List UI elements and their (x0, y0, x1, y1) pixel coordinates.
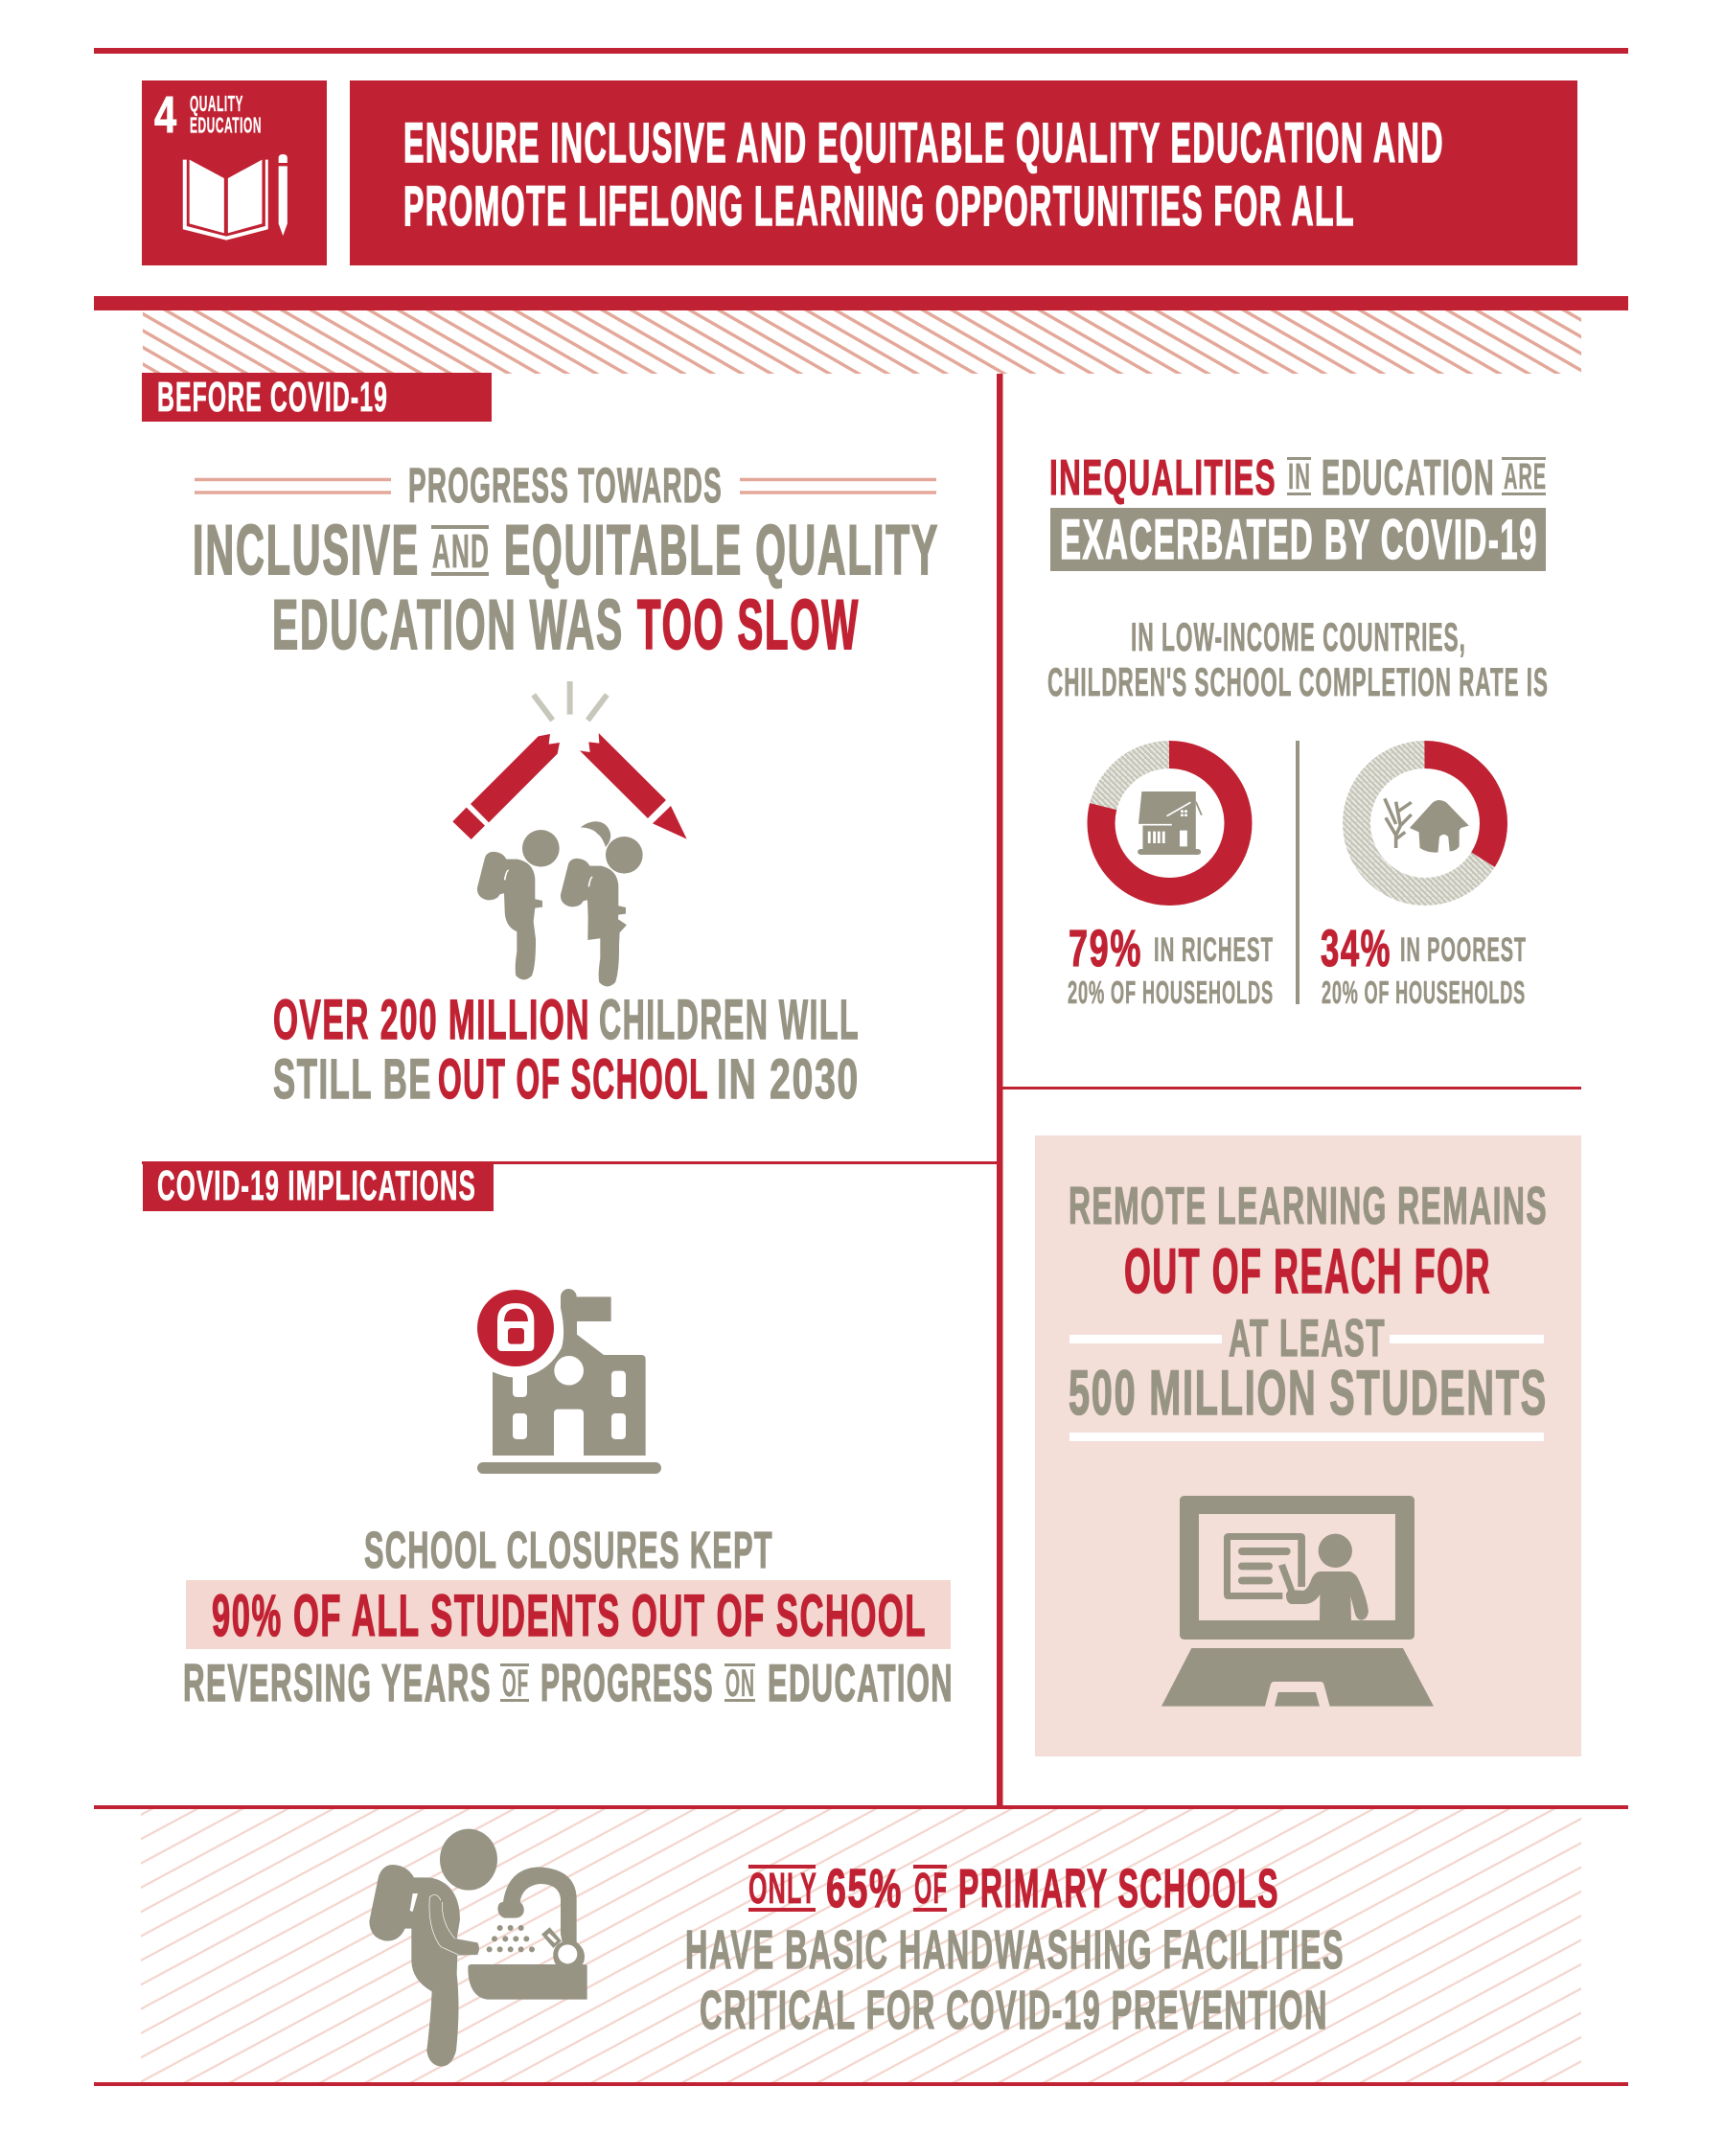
heading: inequalities in education are: EDUCATION (1322, 450, 1495, 506)
stat: 34% in poorest (1321, 920, 1527, 1010)
heading: inclusive and equitable quality education was too slow: EDUCATION WAS (272, 586, 624, 664)
bottom rule top (94, 1805, 1628, 1809)
heading: inclusive and equitable quality education was too slow: TOO SLOW (637, 586, 860, 664)
icon: book and pencil (183, 154, 288, 241)
stat: 79% in richest: 79% (1069, 920, 1142, 977)
goal name: EDUCATION (190, 113, 262, 138)
bottom rule (94, 2082, 1628, 2086)
text: at least: AT LEAST (1229, 1308, 1386, 1367)
heading: inequalities in education are: IN (1288, 457, 1311, 497)
text: only 65% of primary schools: OF (914, 1864, 948, 1913)
heading: progress towards: PROGRESS TOWARDS (408, 458, 723, 513)
panel: handwashing (141, 1809, 1581, 2082)
statement: over 200 million children: OVER 200 MILLION (273, 989, 590, 1051)
vertical separator (1296, 741, 1300, 1004)
icon: broken pencil over two children (452, 681, 687, 986)
icon: house (1138, 791, 1202, 855)
header: goal title banner (350, 80, 1577, 265)
donut chart: richest 79% (1101, 741, 1300, 1004)
stat: 34% in poorest: 34% (1321, 920, 1392, 977)
heading: inclusive and equitable quality education was too slow: EQUITABLE QUALITY (504, 512, 939, 589)
thick rule (94, 296, 1628, 310)
statement: over 200 million children: OUT OF SCHOOL (438, 1048, 709, 1111)
stat: 34% in poorest: IN POOREST (1400, 931, 1527, 969)
heading: progress towards (195, 458, 936, 513)
heading: inclusive and equitable quality education was too slow (193, 512, 939, 664)
left horizontal divider (142, 1161, 997, 1164)
statement: over 200 million children: IN 2030 (717, 1048, 860, 1111)
text: only 65% of primary schools (748, 1858, 1279, 1919)
heading: inequalities in education are: INEQUALITIES (1049, 450, 1276, 506)
statement: reversing years of progress on education: OF (502, 1663, 529, 1705)
goal name (190, 91, 262, 138)
heading: inclusive and equitable quality education was too slow: AND (432, 526, 490, 578)
heading: inclusive and equitable quality education was too slow: INCLUSIVE (193, 512, 420, 589)
donut chart: poorest 34% (1357, 755, 1493, 891)
callout: 90% of all students out of school: 90% OF ALL STUDENTS OUT OF SCHOOL (212, 1583, 927, 1648)
icon: hut and tree (1385, 798, 1469, 853)
stat: 79% in richest: IN RICHEST (1154, 931, 1274, 969)
callout: 90% of all students out of school (186, 1580, 951, 1649)
text: 500 million students (1069, 1357, 1548, 1441)
statement: reversing years of progress on education: PROGRESS (540, 1653, 714, 1712)
central vertical divider (997, 374, 1002, 1805)
panel: before covid-19 (193, 458, 939, 1111)
right horizontal divider (1002, 1087, 1581, 1089)
panel: covid-19 implications (183, 1289, 954, 1712)
header: goal 4 tile (142, 80, 327, 265)
text: at least (1070, 1308, 1544, 1367)
heading: inequalities in education are: ARE (1504, 457, 1547, 497)
icon: laptop with teacher (1162, 1496, 1434, 1707)
section label: covid-19 implications (143, 1162, 494, 1211)
icon: locked school (477, 1289, 661, 1474)
text: completion rate intro (1047, 614, 1549, 704)
stat: 34% in poorest: 20% OF HOUSEHOLDS (1322, 975, 1526, 1010)
goal name: QUALITY (190, 91, 243, 116)
statement: reversing years of progress on education: REVERSING YEARS (183, 1653, 492, 1712)
section label: before covid-19: BEFORE COVID-19 (157, 374, 388, 421)
statement: reversing years of progress on education: EDUCATION (768, 1653, 954, 1712)
section label: covid-19 implications: COVID-19 IMPLICATIONS (157, 1162, 476, 1209)
panel: remote learning (1035, 1135, 1581, 1756)
top rule (94, 48, 1628, 54)
statement: school closures: SCHOOL CLOSURES KEPT (364, 1522, 773, 1579)
text: only 65% of primary schools: PRIMARY SCHOOLS (958, 1858, 1279, 1919)
statement: over 200 million children: CHILDREN WILL (599, 989, 860, 1051)
statement: reversing years of progress on education: ON (725, 1663, 755, 1705)
stat: 79% in richest (1068, 920, 1274, 1010)
text: only 65% of primary schools: ONLY (748, 1864, 817, 1913)
goal number: 4 (154, 86, 178, 144)
stat: 79% in richest: 20% OF HOUSEHOLDS (1068, 975, 1274, 1010)
icon: child washing hands (369, 1829, 587, 2067)
top hatched band (143, 310, 1581, 374)
panel: inequalities (1047, 450, 1549, 1010)
statement: over 200 million children: STILL BE (273, 1048, 432, 1111)
text: only 65% of primary schools: 65% (826, 1858, 903, 1919)
statement: over 200 million children (273, 989, 860, 1111)
